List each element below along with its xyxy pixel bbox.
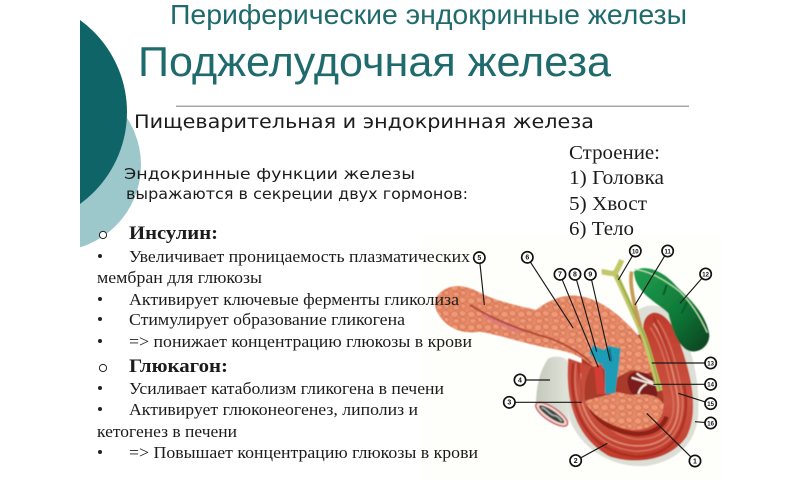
leader lines and numbers: 4 [518, 377, 522, 384]
photo background [422, 236, 722, 480]
leader lines and numbers: 2 [574, 458, 578, 465]
leader lines and numbers: 9 [588, 272, 592, 279]
glucagon list [97, 357, 478, 462]
structure list: 5) Хвост [569, 193, 647, 215]
intro text: выражаются в секреции двух гормонов: [126, 185, 468, 203]
leader lines and numbers: 14 [707, 383, 715, 389]
glucagon list: => Повышает концентрацию глюкозы в крови [129, 443, 478, 462]
structure list: 6) Тело [569, 218, 634, 240]
stomach lumen [532, 398, 571, 430]
insulin list: мембран для глюкозы [97, 268, 263, 287]
intro text: Эндокринные функции железы [124, 165, 415, 183]
gallbladder [634, 268, 709, 351]
section heading: Пищеварительная и эндокринная железа [134, 111, 594, 133]
grey peritoneum [567, 306, 698, 466]
leader lines and numbers: 6 [525, 255, 529, 262]
portal vein [589, 345, 621, 394]
insulin list: => понижает концентрацию глюкозы в крови [129, 332, 472, 351]
leader lines and numbers: 10 [632, 249, 639, 255]
leader lines and numbers: 1 [693, 458, 697, 465]
leader lines and numbers: 13 [707, 361, 715, 367]
leader lines and numbers: 8 [573, 272, 577, 279]
insulin list: Увеличивает проницаемость плазматических [129, 247, 471, 266]
leader lines and numbers: 12 [702, 272, 710, 278]
anatomical illustration [435, 245, 716, 467]
structure list: Строение: [569, 142, 660, 164]
insulin list: Инсулин: [129, 224, 218, 244]
main title: Поджелудочная железа [138, 38, 612, 85]
leader lines and numbers: 11 [664, 249, 671, 255]
leader lines and numbers [474, 245, 716, 467]
glucagon list: Усиливает катаболизм гликогена в печени [129, 379, 444, 398]
stomach stump [536, 357, 569, 423]
leader lines and numbers: 15 [707, 402, 715, 408]
leader lines and numbers: 16 [707, 421, 715, 427]
pancreas [435, 286, 663, 430]
duodenum [567, 312, 694, 461]
artery [594, 364, 605, 394]
slide [80, 4, 718, 468]
title divider [176, 106, 689, 107]
leader lines and numbers: 3 [507, 400, 511, 407]
glucagon list: Глюкагон: [129, 357, 228, 377]
backing tissue [582, 330, 667, 407]
structure list [569, 142, 664, 240]
leader lines and numbers: 7 [558, 272, 562, 279]
glucagon list: Активирует глюконеогенез, липолиз и [129, 400, 418, 419]
insulin list: Стимулирует образование гликогена [129, 310, 405, 329]
bile duct [602, 260, 660, 391]
intro text [124, 165, 468, 203]
decorative circles [80, 20, 141, 248]
glucagon list: кетогенез в печени [97, 422, 237, 441]
insulin list: Активирует ключевые ферменты гликолиза [129, 290, 459, 309]
structure list: 1) Головка [569, 167, 664, 189]
cystic duct [631, 272, 641, 327]
leader lines and numbers: 5 [477, 255, 481, 262]
duodenum lumen [628, 372, 657, 398]
papilla [632, 373, 662, 394]
insulin list [97, 224, 472, 351]
